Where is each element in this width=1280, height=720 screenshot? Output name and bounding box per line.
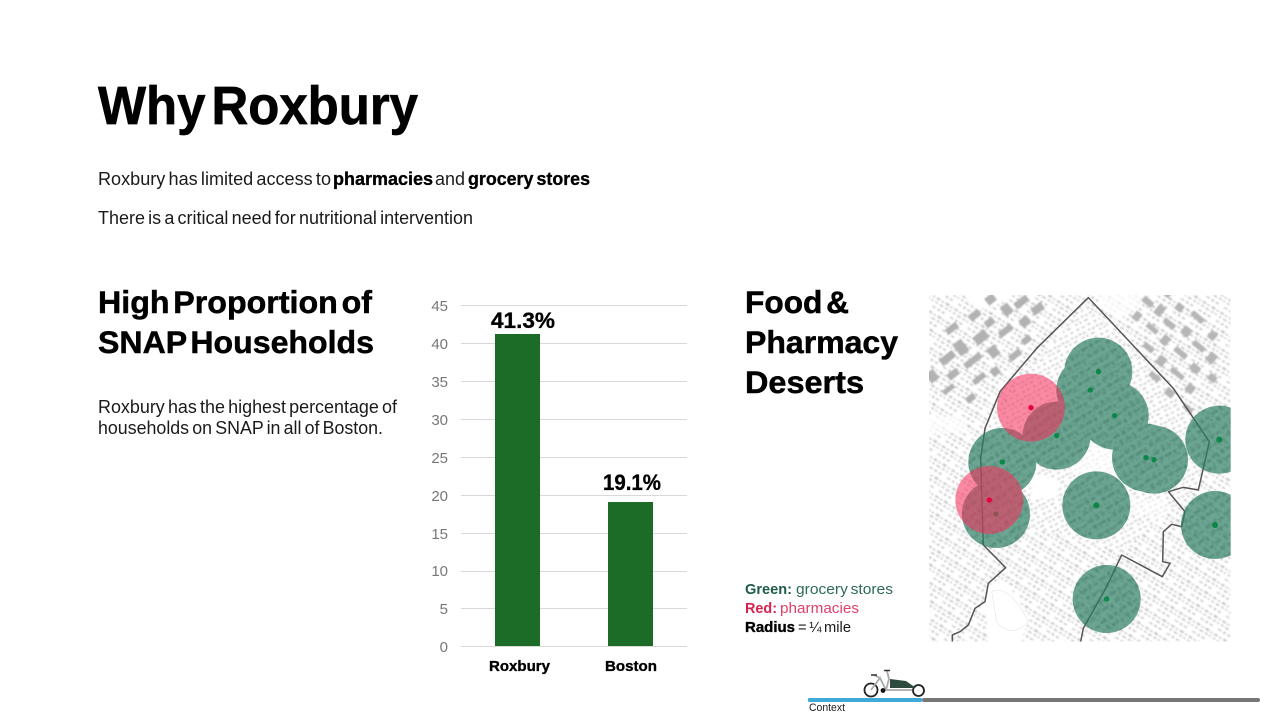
axis labels: 30 — [431, 412, 448, 429]
heading: food and pharmacy deserts: Food & — [745, 284, 849, 320]
building texture inside circles — [966, 338, 1230, 633]
axis labels: 10 — [431, 563, 448, 580]
map legend: Green: — [745, 581, 792, 598]
map: food and pharmacy access — [929, 295, 1231, 642]
grocery store points — [993, 369, 1222, 602]
progress label: Context — [809, 702, 845, 714]
map legend: pharmacies — [780, 600, 859, 617]
map legend: = ¼ mile — [798, 619, 851, 636]
SNAP description: Roxbury has the highest percentage of — [98, 396, 398, 417]
axis labels: 25 — [431, 450, 448, 467]
map legend: Red: — [745, 600, 777, 617]
SNAP description — [98, 396, 398, 438]
park outline — [992, 590, 1028, 630]
intro text: Roxbury has limited access to — [98, 168, 331, 189]
map legend — [745, 581, 893, 636]
intro text — [98, 168, 590, 228]
intro text: pharmacies — [333, 168, 433, 189]
larger city blocks, north-west — [929, 295, 1046, 404]
category: Boston: Boston — [605, 658, 657, 675]
neighborhood boundary — [952, 298, 1209, 642]
axis labels: 20 — [431, 488, 448, 505]
heading: food and pharmacy deserts: Deserts — [745, 364, 864, 400]
icon: cargo bike — [864, 670, 924, 696]
bar: Boston — [608, 502, 653, 646]
axis labels: 5 — [440, 601, 448, 618]
intro text: There is a critical need for nutritional intervention — [98, 207, 473, 228]
heading: SNAP households — [98, 284, 374, 360]
progress bar — [808, 698, 1260, 714]
axis labels: 0 — [440, 639, 448, 656]
intro text: and — [435, 168, 465, 189]
map legend: Radius — [745, 619, 795, 636]
title: Why Roxbury — [98, 76, 418, 136]
value: Boston: 19.1% — [603, 470, 661, 495]
axis labels: 35 — [431, 374, 448, 391]
axis labels: 40 — [431, 336, 448, 353]
bar: Roxbury — [495, 334, 540, 646]
intro text: grocery stores — [468, 168, 590, 189]
bar chart — [431, 298, 687, 675]
axis labels: 15 — [431, 526, 448, 543]
heading: SNAP households: SNAP Households — [98, 324, 374, 360]
heading: food and pharmacy deserts — [745, 284, 898, 400]
value: Roxbury: 41.3% — [491, 308, 555, 333]
green quarter-mile radius circles — [962, 338, 1253, 633]
heading: SNAP households: High Proportion of — [98, 284, 373, 320]
pharmacy points — [987, 405, 1034, 503]
category: Roxbury: Roxbury — [489, 658, 551, 675]
heading: food and pharmacy deserts: Pharmacy — [745, 324, 898, 360]
axis labels — [431, 298, 448, 656]
larger city blocks, north-east — [1131, 295, 1218, 414]
map legend: grocery stores — [796, 581, 893, 598]
red quarter-mile radius circles — [955, 374, 1065, 534]
building footprint base map — [929, 295, 1230, 642]
SNAP description: households on SNAP in all of Boston. — [98, 417, 383, 438]
axis labels: 45 — [431, 298, 448, 315]
